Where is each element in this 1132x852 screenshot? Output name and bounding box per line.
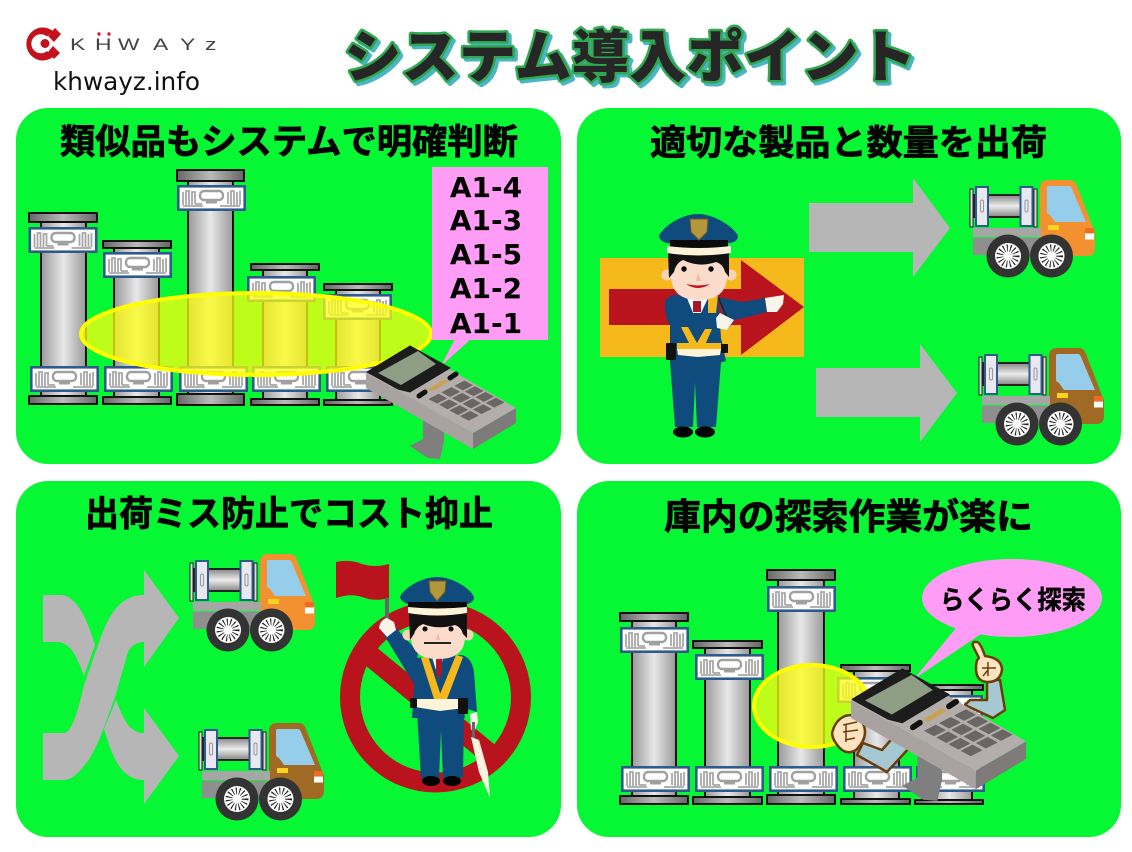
speech bubble: らくらく探索 [940,585,1086,615]
logo [26,28,216,96]
direction sign [600,258,804,357]
icon: brown truck [199,723,324,820]
prohibition sign [350,612,521,782]
panel heading: 庫内の探索作業が楽に [664,496,1033,537]
pipes row [29,170,394,405]
crossed arrows [43,570,179,804]
panel heading: 適切な製品と数量を出荷 [650,124,1047,163]
highlight ellipse [81,293,431,375]
officer pointing [659,214,784,438]
icon: handheld scanner large [851,669,1026,801]
pipes row [620,570,984,804]
callout: scanned codes: A1-3 [450,204,522,237]
icon: orange truck [190,554,315,652]
title: システム導入ポイント [344,26,916,90]
arrow: upper [809,178,950,277]
panel heading: 類似品もシステムで明確判断 [60,123,518,162]
arrow: lower [816,344,957,442]
callout: scanned codes: A1-1 [450,307,522,340]
icon: brown truck [979,348,1104,446]
highlight ellipse [754,665,870,747]
callout: scanned codes: A1-5 [450,238,522,271]
callout: scanned codes [432,167,548,366]
logo: KHWAYz [70,36,216,54]
mascot arms [832,642,1005,772]
icon: orange truck [970,180,1095,278]
title: システム導入ポイント [344,26,916,90]
callout: scanned codes: A1-4 [450,171,522,204]
officer with flags [336,561,490,798]
panel: easy warehouse search [577,481,1121,837]
panel heading: 出荷ミス防止でコスト抑止 [85,495,493,534]
icon: handheld scanner [366,346,516,459]
panel: shipping error prevention [16,481,561,837]
panel: similar products [16,108,561,464]
callout: scanned codes: A1-2 [450,272,522,305]
speech bubble [914,559,1102,679]
title: システム導入ポイント [347,29,919,93]
panel: correct shipping [577,108,1121,464]
site url: khwayz.info [53,67,200,96]
